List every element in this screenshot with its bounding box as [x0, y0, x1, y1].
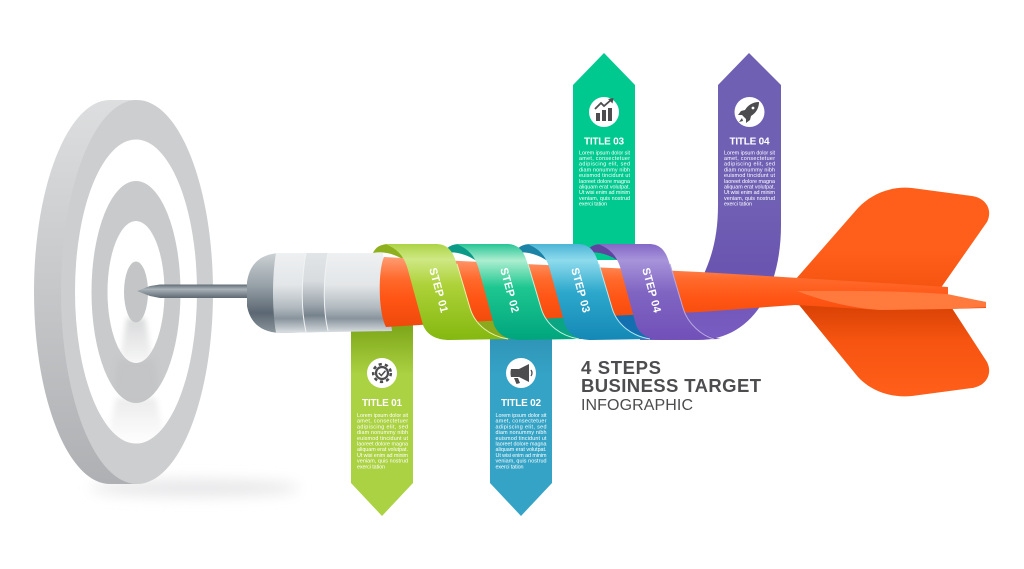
heading: 4 steps business target infographic — [581, 357, 762, 414]
text: title 01 body: exerci tation — [357, 464, 385, 470]
ribbon inner backs — [373, 244, 657, 339]
text: title 01 body: euismod tincidunt ut — [357, 436, 408, 442]
text: title 03 body: diam nonummy nibh — [579, 167, 630, 173]
text: title 02 body: exerci tation — [496, 464, 524, 470]
ribbon: step 01: STEP 01 — [426, 266, 450, 314]
heading: 4 steps business target infographic: BUSINESS TARGET — [581, 375, 762, 396]
panel: title 03 arrow — [573, 53, 635, 260]
text: title 03 body: amet, consectetuer — [579, 156, 630, 162]
text: title 03 body: adipiscing elit, sed — [579, 162, 630, 168]
text: title 04 body: exerci tation — [724, 202, 752, 208]
text: title 03 body: Ut wisi enim ad minim — [579, 190, 630, 196]
text: title 04 body: diam nonummy nibh — [724, 167, 775, 173]
ribbon: step 03 — [527, 244, 650, 340]
text: title 02 body: Lorem ipsum dolor sit — [496, 413, 547, 419]
dart flights — [795, 188, 989, 396]
dart barrel — [247, 253, 392, 333]
dart shaft — [380, 257, 986, 327]
text: title 04 body — [724, 150, 776, 208]
text: title 02 body: Ut wisi enim ad minim — [496, 453, 547, 459]
ribbon: step 02 — [456, 244, 579, 340]
ribbon: step 03: STEP 03 — [568, 266, 592, 314]
text: title 04 body: adipiscing elit, sed — [724, 162, 775, 168]
text: title 01 body: amet, consectetuer — [357, 419, 408, 425]
panel: title 01 arrow — [351, 325, 413, 516]
text: title 02 body: adipiscing elit, sed — [496, 424, 546, 430]
text: title 03 body: aliquam erat volutpat. — [579, 185, 630, 191]
text: title 03 body: veniam, quis nostrud — [579, 196, 630, 202]
target shadow — [90, 480, 300, 496]
text: title 04 body: veniam, quis nostrud — [724, 196, 775, 202]
target board — [34, 100, 213, 484]
heading: 4 steps business target infographic: 4 STEPS — [581, 357, 661, 378]
dart pin — [137, 284, 248, 298]
text: title 04 body: aliquam erat volutpat. — [724, 185, 775, 191]
text: title 02 body: amet, consectetuer — [496, 419, 547, 425]
text: title 04 body: euismod tincidunt ut — [724, 173, 776, 179]
text: title 02 body — [496, 413, 547, 470]
text: title 02 body: laoreet dolore magna — [496, 442, 546, 448]
text: title 02 body: aliquam erat volutpat. — [496, 447, 546, 453]
heading: 4 steps business target infographic: INFOGRAPHIC — [581, 397, 693, 414]
ribbon: step 04 — [598, 244, 721, 340]
text: title 04 body: Ut wisi enim ad minim — [724, 190, 776, 196]
heading: title 02: TITLE 02 — [501, 398, 541, 409]
text: title 02 body: euismod tincidunt ut — [496, 436, 547, 442]
text: title 01 body: aliquam erat volutpat. — [357, 447, 408, 453]
text: title 03 body — [579, 150, 630, 208]
heading: title 03: TITLE 03 — [584, 136, 624, 148]
icon: megaphone — [506, 358, 536, 388]
icon: gear with check — [367, 358, 397, 388]
panel: title 02 arrow — [490, 330, 552, 516]
text: title 03 body: Lorem ipsum dolor sit — [579, 150, 630, 156]
text: title 02 body: veniam, quis nostrud — [496, 459, 546, 465]
text: title 03 body: euismod tincidunt ut — [579, 173, 630, 179]
text: title 01 body: Ut wisi enim ad minim — [357, 453, 408, 459]
text: title 04 body: amet, consectetuer — [724, 156, 775, 162]
heading: title 01: TITLE 01 — [362, 398, 402, 409]
text: title 04 body: laoreet dolore magna — [724, 179, 775, 185]
text: title 01 body: veniam, quis nostrud — [357, 459, 408, 465]
text: title 01 body — [357, 413, 408, 470]
text: title 04 body: Lorem ipsum dolor sit — [724, 150, 776, 156]
heading: title 04: TITLE 04 — [730, 136, 770, 148]
text: title 01 body: adipiscing elit, sed — [357, 424, 408, 430]
ribbon: step 01 — [385, 244, 508, 340]
text: title 03 body: laoreet dolore magna — [579, 179, 630, 185]
text: title 03 body: exerci tation — [579, 202, 607, 208]
text: title 01 body: Lorem ipsum dolor sit — [357, 413, 408, 419]
ribbon: step 02: STEP 02 — [497, 266, 521, 314]
text: title 01 body: diam nonummy nibh — [357, 430, 408, 436]
icon: rocket — [734, 97, 764, 127]
icon: growth chart — [589, 97, 619, 127]
text: title 01 body: laoreet dolore magna — [357, 442, 408, 448]
text: title 02 body: diam nonummy nibh — [496, 430, 546, 436]
panel: title 04 arrow — [640, 53, 781, 340]
ribbon: step 04: STEP 04 — [639, 266, 663, 315]
